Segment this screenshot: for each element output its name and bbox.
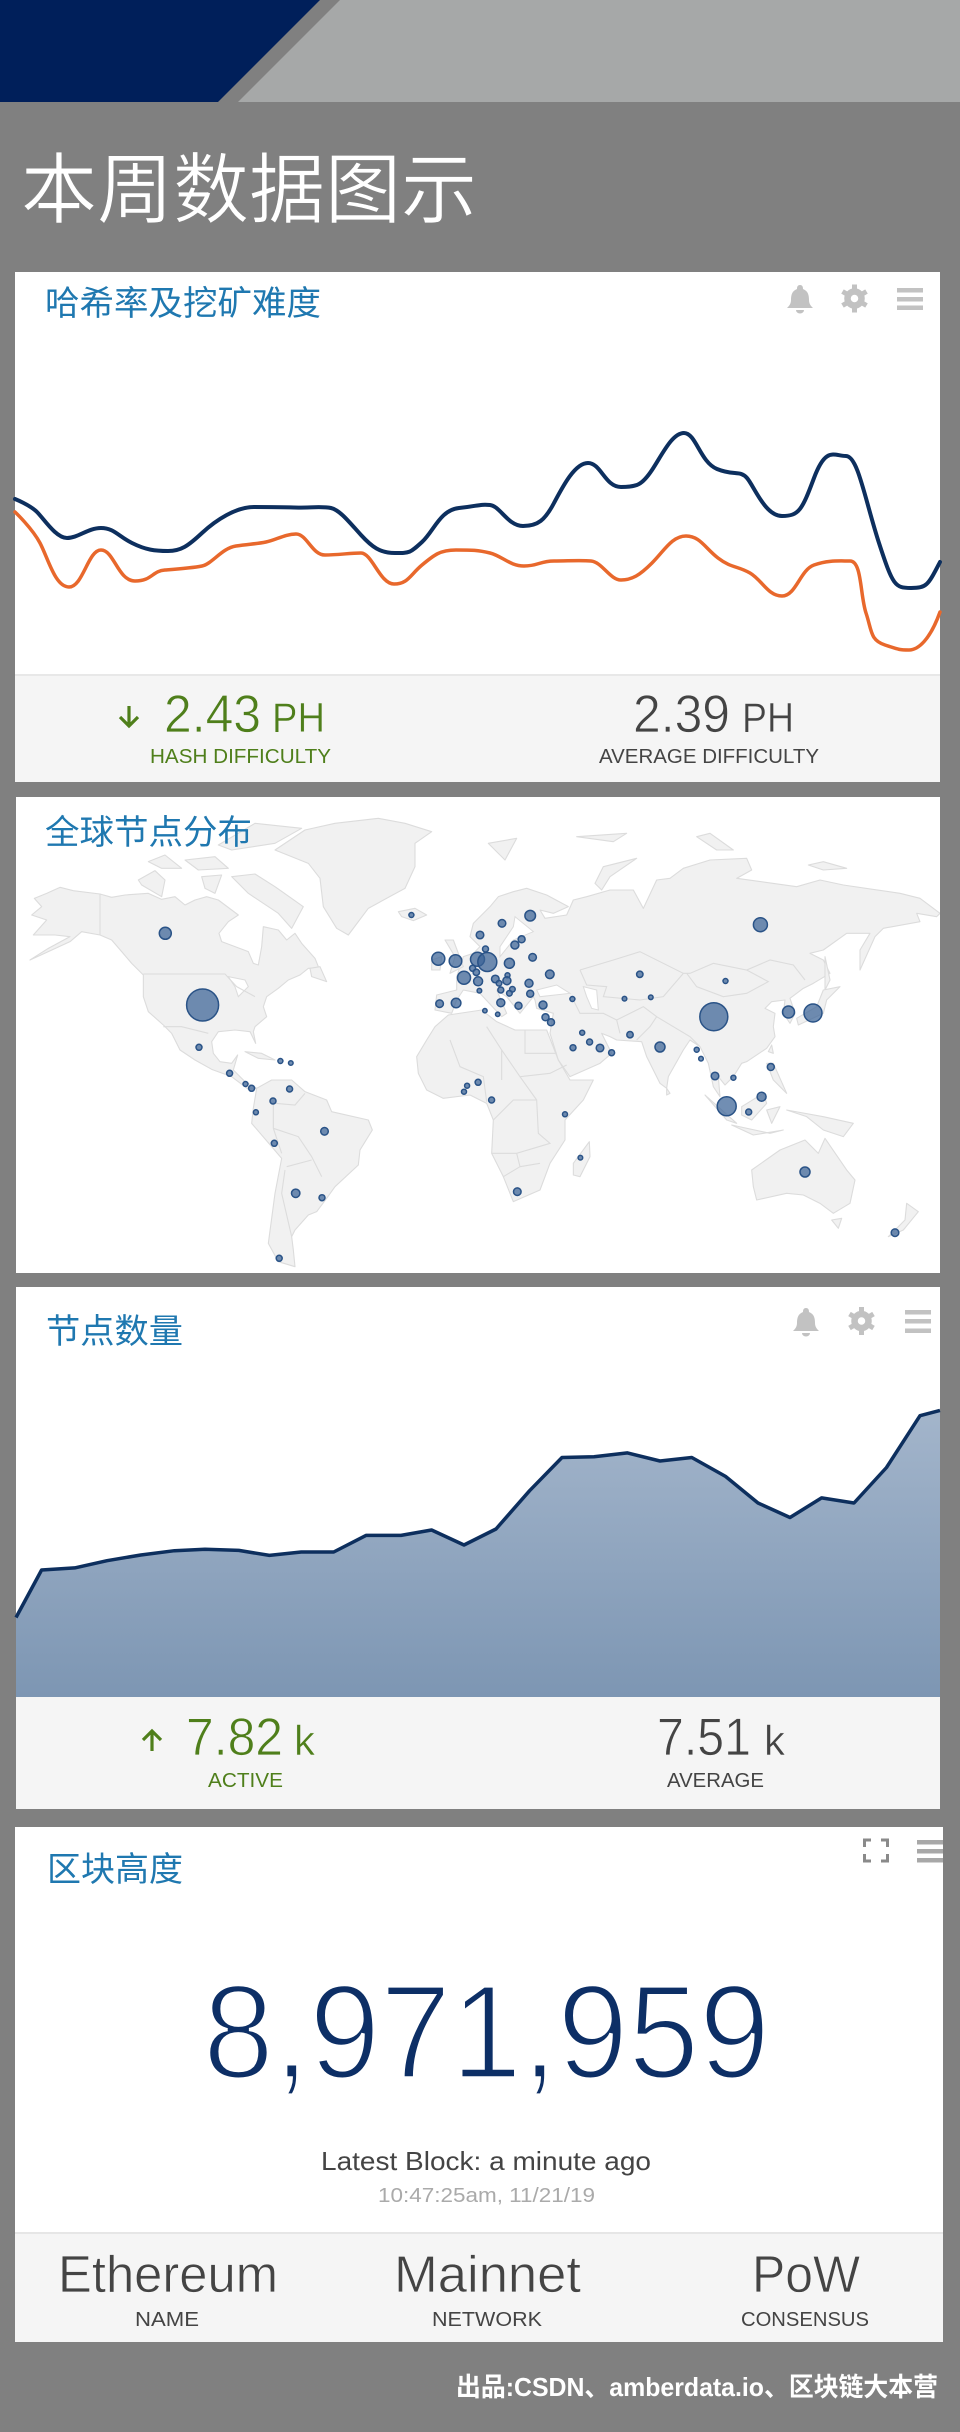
stat: active: 7.82: [186, 1708, 283, 1767]
stats strip: [15, 675, 940, 782]
stat: network: [398, 2254, 580, 2326]
icon: gear: [850, 1307, 874, 1335]
landmass: Americas and Greenland: [30, 818, 432, 1267]
line chart: hash and difficulty: [15, 433, 940, 650]
stat: name: Ethereum: [58, 2246, 278, 2304]
stat: network: Mainnet: [394, 2246, 582, 2304]
stat: active: k: [294, 1717, 316, 1764]
title: 本周数据图示: [21, 129, 477, 240]
node bubbles: [159, 910, 899, 1261]
world map: [30, 818, 940, 1267]
header banner: [0, 0, 960, 102]
icon: menu: [905, 1310, 931, 1333]
landmass: Eurasia, Africa, Oceania: [417, 833, 940, 1237]
stat: average difficulty: AVERAGE DIFFICULTY: [599, 745, 819, 768]
icon: menu: [917, 1840, 943, 1862]
stat: active: [186, 1708, 316, 1792]
stat: name: NAME: [135, 2309, 199, 2331]
panel heading: hash rate: 哈希率及挖矿难度: [45, 276, 321, 325]
panel heading: block height: 区块高度: [47, 1842, 183, 1891]
stat: hash difficulty: PH: [272, 694, 325, 741]
stat: average: 7.51: [657, 1708, 751, 1767]
stats strip: [16, 1697, 940, 1809]
stat: average difficulty: 2.39: [633, 685, 730, 744]
stat: average: k: [764, 1717, 786, 1764]
timestamp: 10:47:25am, 11/21/19: [378, 2185, 595, 2207]
stat: average: AVERAGE: [667, 1769, 764, 1792]
stat: hash difficulty: 2.43: [164, 685, 261, 744]
stat: name: [62, 2254, 274, 2326]
icon: fullscreen: [864, 1840, 888, 1861]
stat: hash difficulty: [150, 685, 331, 768]
latest block time: Latest Block: a minute ago: [321, 2146, 651, 2176]
panel: node count: [16, 1287, 940, 1809]
panel: global node map: [16, 797, 940, 1273]
icon: bell: [787, 285, 813, 314]
stat: average: [657, 1708, 786, 1792]
panel heading: node count: 节点数量: [46, 1304, 183, 1353]
map title: 全球节点分布: [45, 805, 252, 854]
line: difficulty (navy): [15, 433, 940, 588]
panel: hash rate and difficulty: [15, 272, 940, 782]
area chart: active nodes: [16, 1410, 940, 1697]
icon: up arrow: [143, 1731, 161, 1751]
stat: active: ACTIVE: [208, 1769, 283, 1792]
stat: consensus: CONSENSUS: [741, 2309, 869, 2331]
line: hash rate (orange): [15, 512, 940, 650]
panel: block height: [15, 1827, 947, 2342]
info strip: [15, 2233, 943, 2342]
stat: hash difficulty: HASH DIFFICULTY: [150, 745, 331, 768]
stat: average difficulty: [599, 685, 819, 768]
credit line: 出品:CSDN、amberdata.io、区块链大本营: [456, 2372, 938, 2402]
stat: consensus: [742, 2256, 868, 2326]
icon: gear: [842, 284, 866, 312]
stat: average difficulty: PH: [742, 694, 794, 741]
stat: consensus: PoW: [752, 2246, 860, 2304]
icon: down arrow: [120, 706, 138, 726]
big number: latest block: 8,971,959: [203, 1958, 770, 2107]
icon: menu: [897, 288, 923, 310]
icon: bell: [793, 1308, 819, 1336]
stat: network: NETWORK: [432, 2309, 543, 2331]
